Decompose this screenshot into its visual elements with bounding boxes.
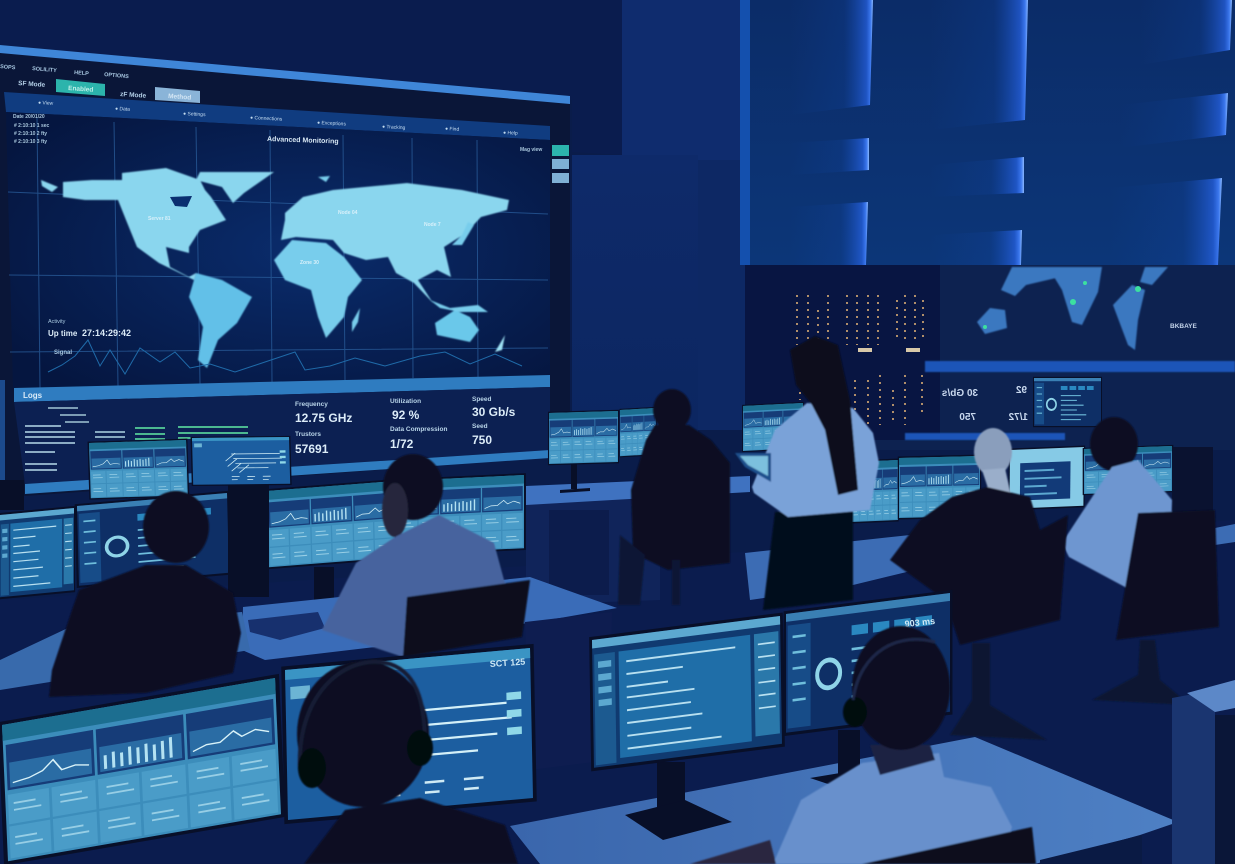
- main video wall screen: [0, 45, 570, 496]
- world map panel: [6, 112, 550, 388]
- logs text lines: [25, 408, 258, 470]
- side buttons: [552, 145, 569, 183]
- monitor: right row 1: [851, 458, 899, 524]
- front desk: [510, 737, 1178, 864]
- main video wall screen: ● Exceptions: [317, 120, 347, 128]
- main video wall screen: ● Connections: [250, 115, 283, 123]
- lower screen edge: [25, 450, 550, 494]
- metrics: 750: [472, 433, 492, 447]
- monitor: far left: [0, 506, 75, 599]
- monitor: back row 3: [742, 402, 804, 452]
- back video wall: [745, 265, 1235, 450]
- top menu text: SOPS: [0, 64, 16, 71]
- map grid: [8, 118, 548, 388]
- top menu text: OPTIONS: [104, 72, 129, 80]
- signal line chart: [48, 340, 522, 374]
- front left monitor: [0, 674, 285, 864]
- metrics: 92 %: [392, 408, 420, 422]
- mode tabs: SF Mode: [18, 80, 46, 89]
- monitor: centre pair: [395, 473, 526, 556]
- date readout: Mag view: [520, 147, 542, 153]
- monitor: wall monitor upper right: [1033, 377, 1102, 427]
- mirrored reflected metrics: 30 Gb/s: [941, 388, 978, 399]
- right back monitor readout: 903 ms: [904, 616, 936, 629]
- lit wall strip: [925, 361, 1235, 372]
- mirrored reflected metrics: 92: [1015, 385, 1027, 396]
- mid left monitors: [0, 473, 526, 599]
- uptime readout: Activity: [48, 319, 66, 325]
- map labels: Server 81: [148, 216, 171, 222]
- back video wall: BKBAYE: [1170, 323, 1198, 330]
- metrics: [295, 396, 516, 456]
- seated man in suit: [322, 454, 530, 657]
- date readout: # 2:10:10 1 sec: [14, 123, 50, 129]
- mirrored reflected metrics: 750: [959, 412, 976, 423]
- front centre monitor: [281, 644, 537, 824]
- main video wall screen: ● Find: [445, 126, 460, 133]
- logs header bar: [14, 375, 550, 402]
- metrics: Speed: [472, 396, 492, 403]
- date readout: # 2:10:10 3 fty: [14, 139, 47, 145]
- front right monitor stand: [625, 730, 860, 840]
- mid desk: [0, 577, 617, 770]
- mode tabs: Enabled: [68, 85, 94, 94]
- mirrored reflected metrics: [941, 385, 1028, 423]
- logs panel: [14, 387, 550, 484]
- monitor: back row 1: [548, 410, 619, 465]
- metrics: Trustors: [295, 431, 321, 438]
- main video wall screen: ● Help: [503, 130, 518, 137]
- acoustic wall panels: [750, 0, 1235, 265]
- back monitors: [88, 377, 1173, 524]
- top menu text: SOLILITY: [32, 66, 57, 74]
- map labels: [148, 210, 441, 266]
- top menu text: HELP: [74, 70, 89, 77]
- seated blonde woman: [890, 428, 1068, 740]
- uptime readout: 27:14:29:42: [82, 328, 131, 338]
- map labels: Zone 30: [300, 260, 319, 266]
- uptime readout: Signal: [54, 350, 72, 356]
- server tower right: [1172, 447, 1213, 512]
- operator front right with headset: [690, 626, 1036, 864]
- date readout: Date 20/01/20: [13, 114, 45, 120]
- wall panel column: [572, 0, 750, 445]
- monitor: rear pair left: [88, 439, 189, 500]
- metrics: 1/72: [390, 437, 414, 451]
- metrics: 12.75 GHz: [295, 411, 352, 425]
- metrics: Utilization: [390, 398, 421, 405]
- map labels: Node 7: [424, 222, 441, 228]
- right back monitor: [784, 590, 952, 736]
- monitor: right row 3: [1008, 445, 1085, 510]
- monitor: right row 2: [898, 454, 981, 520]
- upper left dark wall: [0, 0, 622, 155]
- metrics: Data Compression: [390, 426, 447, 433]
- main video wall screen: ● Settings: [183, 111, 206, 118]
- seated woman back centre: [618, 389, 730, 605]
- metrics: Frequency: [295, 401, 328, 408]
- monitor: right row 4: [1083, 445, 1173, 495]
- main video wall screen: ● View: [38, 100, 54, 107]
- monitor: rear pair right: [191, 436, 292, 486]
- metrics: 30 Gb/s: [472, 405, 516, 419]
- floor: [0, 520, 1235, 864]
- metrics: 57691: [295, 442, 329, 456]
- back desk cabinets: [526, 463, 1235, 605]
- front right monitor: [589, 612, 785, 771]
- corner desk right: [1172, 680, 1235, 864]
- standing woman with tablet: [735, 336, 879, 610]
- top menu text: [0, 64, 129, 80]
- seated man left: [49, 491, 241, 697]
- mirrored reflected metrics: 1/72: [1008, 412, 1028, 423]
- main video wall screen: Logs: [23, 391, 43, 400]
- map labels: Node 04: [338, 210, 358, 216]
- mode tabs: [18, 79, 200, 103]
- monitor: left second: [75, 491, 231, 588]
- mode tabs: Method: [168, 93, 191, 102]
- map title: Advanced Monitoring: [267, 136, 339, 145]
- mode tabs: zF Mode: [120, 91, 147, 100]
- hudson bay: [170, 196, 192, 207]
- main video wall screen: ● Data: [115, 106, 130, 113]
- front centre monitor readout: SCT 125: [489, 657, 526, 669]
- monitor: centre: [265, 479, 399, 569]
- monitor stands: [0, 480, 334, 615]
- uptime readout: Up time: [48, 329, 78, 338]
- metrics: Seed: [472, 423, 488, 430]
- uptime readout: [48, 319, 131, 356]
- date readout: [13, 114, 542, 153]
- screen top edge highlight: [0, 45, 570, 104]
- nav bar: [4, 92, 550, 140]
- main video wall screen: ● Tracking: [382, 124, 406, 131]
- operator front centre with headset: [297, 661, 518, 864]
- desk cabinet: [1040, 835, 1142, 864]
- world map: [41, 168, 509, 368]
- date readout: # 2:10:10 2 fty: [14, 131, 47, 137]
- seated man right: [1062, 417, 1219, 705]
- monitor: back row 2: [619, 407, 657, 457]
